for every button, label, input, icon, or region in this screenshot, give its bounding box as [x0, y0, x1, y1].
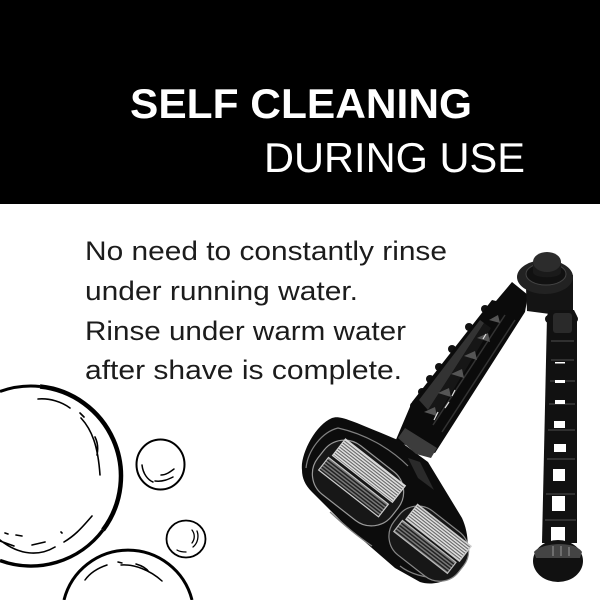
razor pivot connector	[526, 275, 573, 314]
razor handle arm with grip	[395, 282, 528, 453]
body text: Rinse under warm water	[85, 316, 406, 346]
small bubble one	[136, 440, 184, 490]
body text	[85, 236, 447, 385]
razor pivot top	[517, 252, 573, 294]
large bubble	[0, 386, 121, 566]
razor head gusset	[408, 458, 434, 490]
second cartridge	[379, 496, 478, 591]
razor neck collar	[398, 428, 437, 458]
razor head backing	[302, 417, 468, 584]
body text: No need to constantly rinse	[85, 236, 447, 266]
icon: soap bubbles	[0, 386, 206, 600]
body text: after shave is complete.	[85, 355, 402, 385]
bottom bubble	[64, 550, 192, 600]
title: DURING USE	[264, 134, 525, 181]
razor support arm with openings	[542, 310, 578, 543]
header band	[0, 0, 600, 204]
razor head rim	[306, 428, 460, 578]
razor end ball	[533, 540, 583, 582]
razor	[302, 252, 583, 591]
first cartridge	[302, 430, 414, 536]
body text: under running water.	[85, 276, 358, 306]
title: SELF CLEANING	[130, 80, 472, 127]
title	[130, 80, 525, 181]
small bubble two	[166, 520, 206, 558]
